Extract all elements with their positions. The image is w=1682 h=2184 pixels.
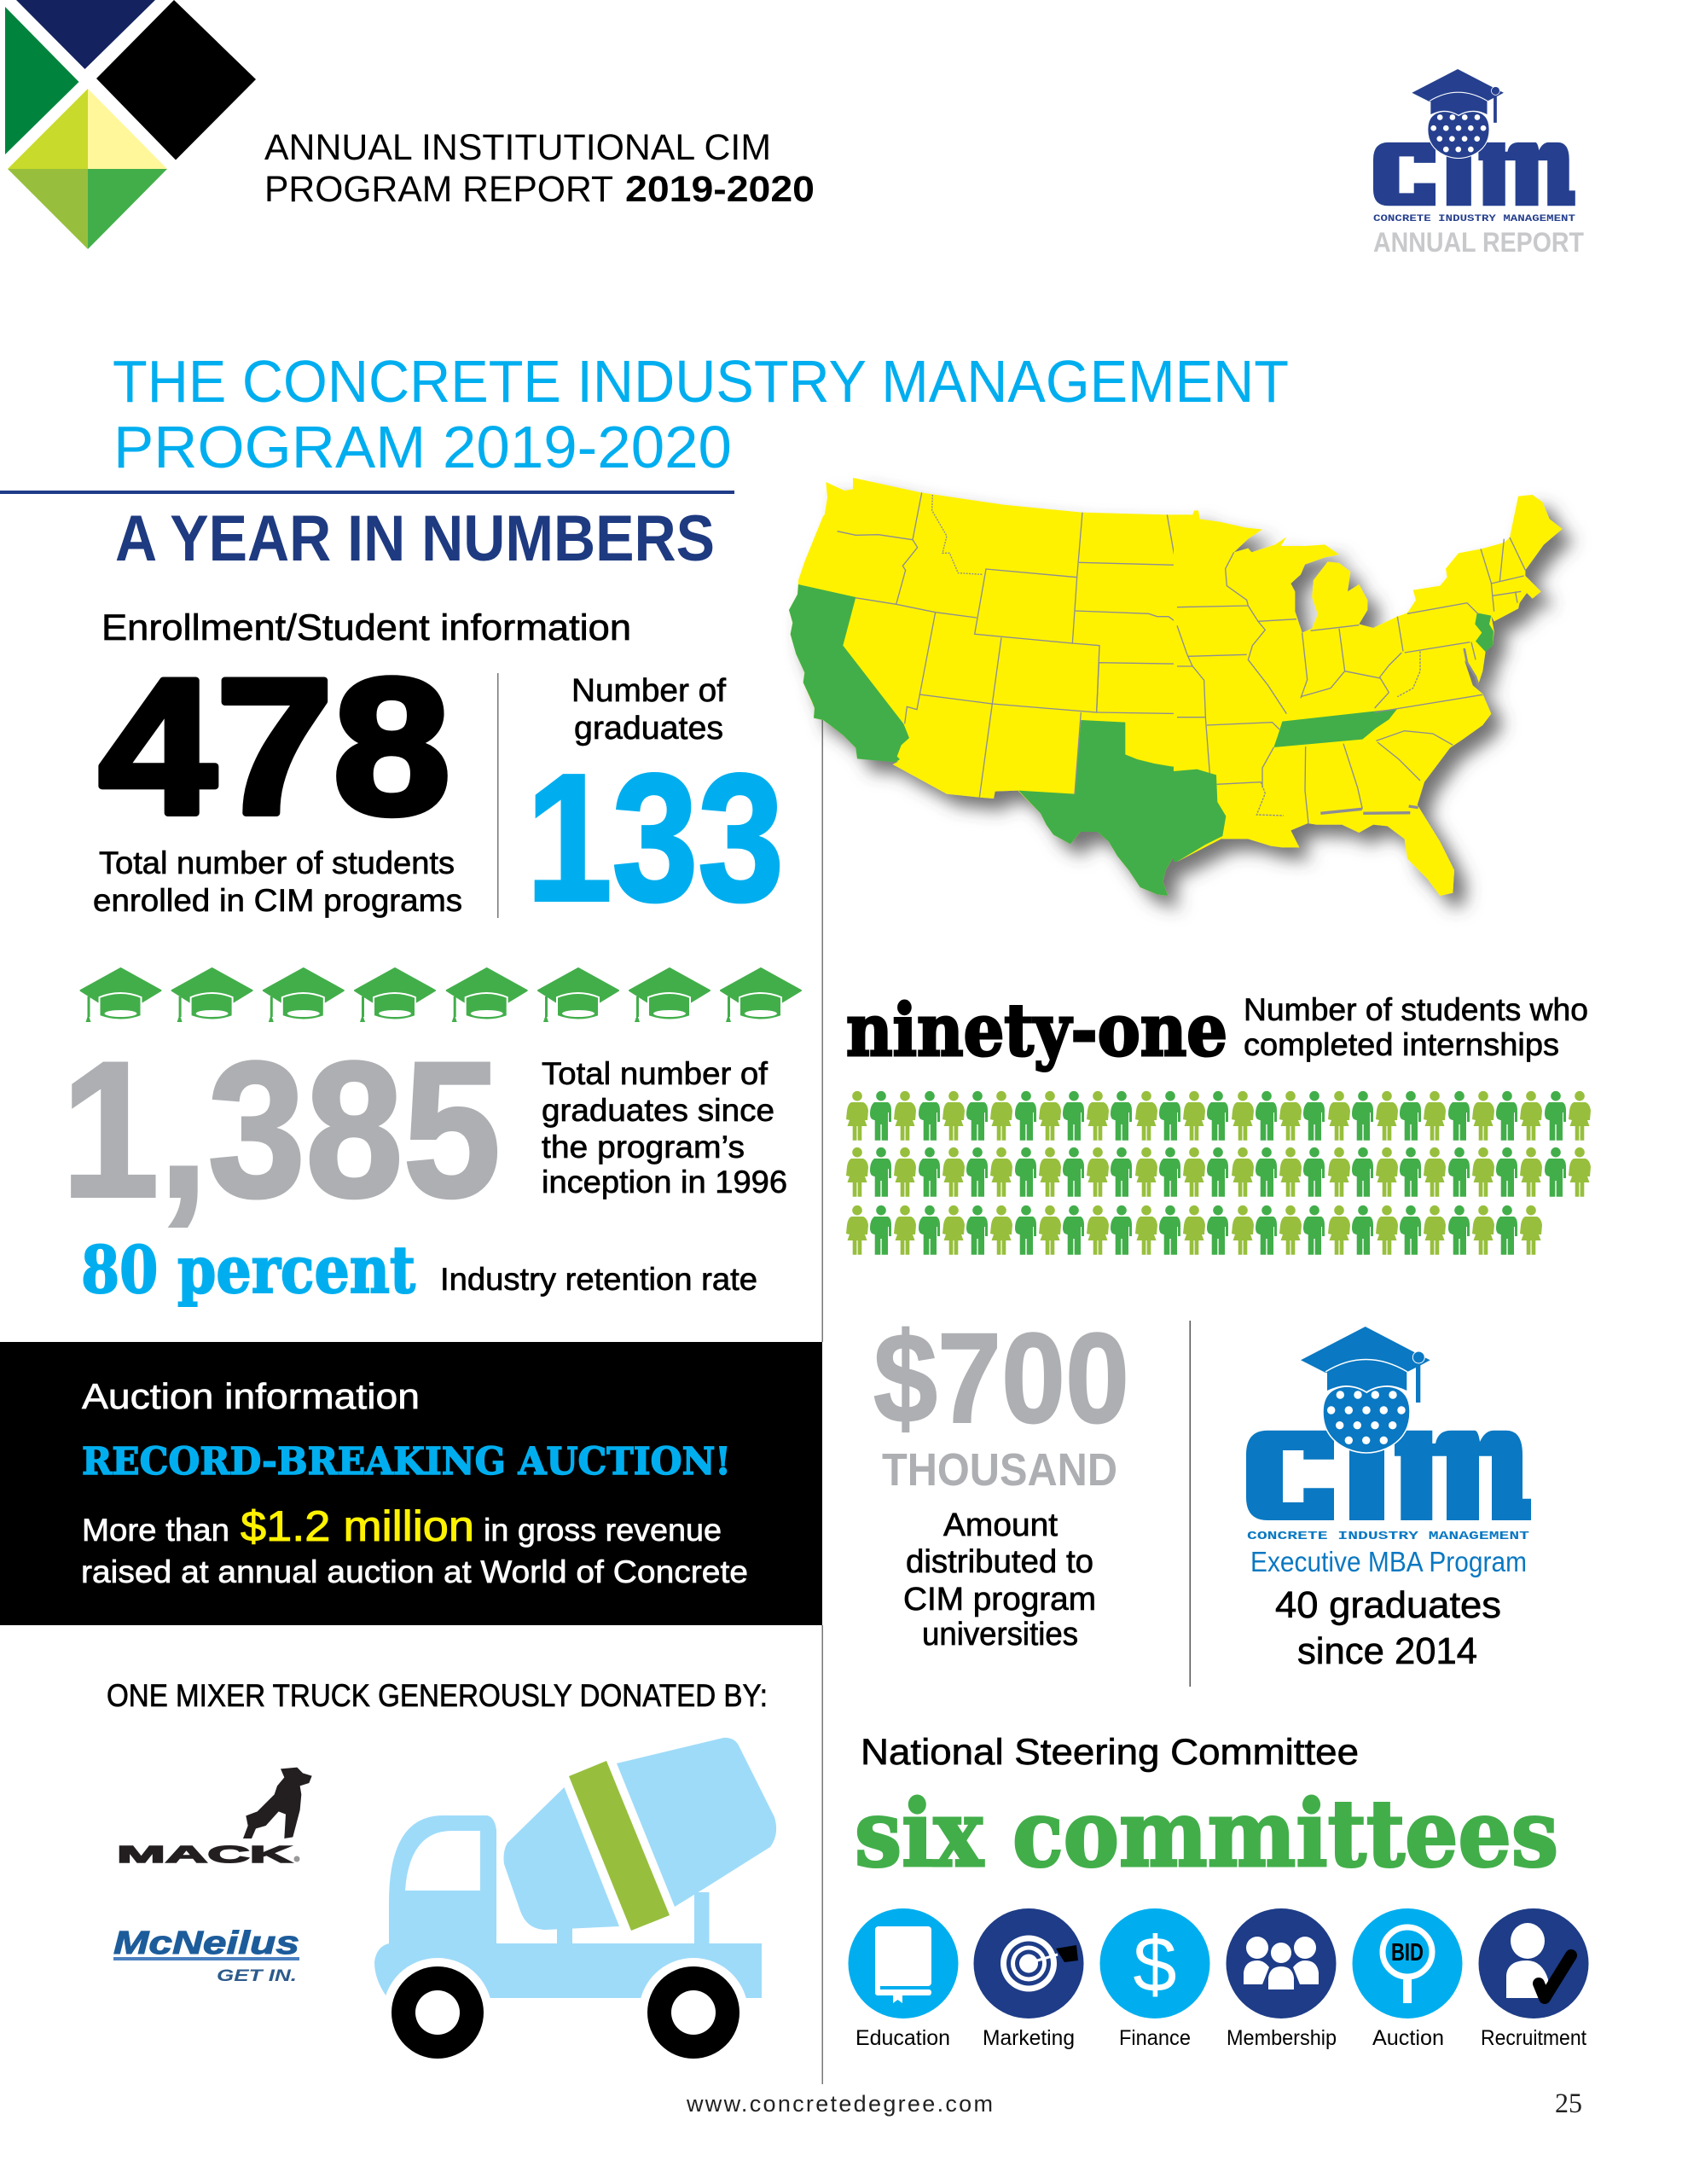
committee labels (856, 2026, 1586, 2050)
stat: $700 thousand: CIM program (903, 1582, 1096, 1618)
logo: CIM annual report: CONCRETE INDUSTRY MANAGEMENT (1373, 214, 1575, 224)
main title (113, 348, 1289, 480)
committee labels: Education (856, 2026, 950, 2050)
panel: auction information: $1.2 million (241, 1502, 474, 1550)
logo: CIM annual report: ANNUAL REPORT (1373, 227, 1584, 258)
stat: 133 graduates (526, 673, 784, 938)
stat: 133 graduates: Number of (571, 673, 726, 709)
heading: mixer truck donors: ONE MIXER TRUCK GENEROUSLY DONATED BY: (107, 1678, 768, 1713)
icon: auction (1353, 1908, 1462, 2018)
map state: Texas east (1174, 770, 1226, 862)
logo: McNeilus (113, 1926, 299, 1985)
logo: CIM executive MBA: 40 graduates (1275, 1584, 1501, 1626)
icon: recruitment (1479, 1908, 1588, 2018)
footer: website: www.concretedegree.com (686, 2091, 993, 2117)
committee labels: Recruitment (1481, 2026, 1586, 2050)
icon: auction: BID (1391, 1939, 1424, 1966)
subheading: enrollment: Enrollment/Student information (102, 607, 631, 648)
committee labels: Auction (1372, 2026, 1444, 2050)
logo: Mack (117, 1768, 312, 1867)
stat: $700 thousand: universities (922, 1617, 1078, 1653)
stat: 478 students: 478 (99, 638, 450, 854)
icon: membership (1227, 1908, 1336, 2018)
icon: education (848, 1908, 959, 2018)
logo: CIM annual report (1373, 69, 1584, 258)
committee labels: Membership (1227, 2026, 1337, 2050)
icons: 91 student figures (846, 1091, 1591, 1255)
panel: auction information: Auction information (82, 1376, 420, 1416)
heading: national steering committee: National Steering Committee (861, 1732, 1359, 1773)
map state: New Jersey (1475, 613, 1494, 652)
stat: 1,385 graduates: 1,385 (61, 1021, 501, 1237)
panel: auction information: in gross revenue (484, 1513, 722, 1548)
icon: finance: $ (1133, 1921, 1177, 2008)
committee labels: Finance (1119, 2026, 1191, 2050)
icon: finance (1100, 1908, 1209, 2018)
stat: ninety-one internships: completed internships (1244, 1027, 1559, 1062)
stat: 478 students: enrolled in CIM programs (93, 883, 462, 918)
stat: $700 thousand (873, 1306, 1129, 1653)
logo: CIM executive MBA (1246, 1327, 1531, 1672)
panel: auction information: raised at annual auction at World of Concrete (81, 1554, 748, 1589)
stat: six committees: six committees (855, 1780, 1558, 1888)
committee labels: Marketing (983, 2026, 1075, 2050)
logo: McNeilus: McNeilus (113, 1926, 299, 1961)
logo: CIM executive MBA: since 2014 (1297, 1630, 1477, 1672)
stat: $700 thousand: $700 (873, 1306, 1129, 1449)
panel: auction information: More than (82, 1513, 229, 1548)
stat: 80 percent retention: 80 percent (81, 1232, 415, 1308)
map state: California (789, 584, 909, 762)
icon: mixer truck (374, 1738, 776, 2067)
stat: $700 thousand: THOUSAND (882, 1444, 1117, 1496)
logo: geometric diamonds (5, 0, 256, 249)
stat: 80 percent retention (81, 1232, 757, 1308)
logo: Mack: MACK (117, 1841, 292, 1867)
stat: $700 thousand: distributed to (906, 1544, 1093, 1580)
stat: 1,385 graduates: Total number of (542, 1056, 768, 1091)
map state: Texas west (1018, 720, 1188, 896)
stat: 1,385 graduates: graduates since (542, 1093, 774, 1128)
main title: THE CONCRETE INDUSTRY MANAGEMENT (113, 348, 1289, 415)
header: report title: 2019-2020 (625, 169, 815, 210)
stat: 80 percent retention: Industry retention rate (440, 1262, 757, 1297)
panel: auction information: RECORD-BREAKING AUCTION! (82, 1440, 731, 1484)
stat: 478 students: Total number of students (99, 845, 455, 880)
stat: $700 thousand: Amount (943, 1507, 1058, 1543)
stat: 1,385 graduates: the program’s (542, 1130, 745, 1165)
logo: McNeilus: GET IN. (217, 1967, 297, 1985)
stat: ninety-one internships: ninety-one (846, 988, 1227, 1072)
icon: marketing (974, 1908, 1083, 2018)
main title: PROGRAM 2019-2020 (113, 414, 732, 480)
stat: 1,385 graduates: inception in 1996 (542, 1165, 787, 1199)
stat: ninety-one internships: Number of students who (1244, 992, 1588, 1027)
stat: 1,385 graduates (61, 1021, 787, 1237)
stat: 478 students (93, 638, 462, 918)
icons: graduation caps row (80, 968, 801, 1022)
header: report title: ANNUAL INSTITUTIONAL CIM (264, 127, 771, 168)
heading: a year in numbers: A YEAR IN NUMBERS (115, 502, 715, 575)
header: report title (264, 127, 815, 210)
stat: 133 graduates: 133 (526, 736, 784, 938)
map state: Tennessee (1273, 709, 1397, 747)
stat: 133 graduates: graduates (574, 711, 723, 746)
stat: ninety-one internships (846, 988, 1588, 1072)
logo: CIM executive MBA: Executive MBA Program (1250, 1546, 1527, 1577)
map: United States (789, 478, 1563, 896)
header: report title: PROGRAM REPORT (264, 169, 613, 210)
footer: page number: 25 (1555, 2088, 1582, 2119)
panel: auction information (0, 1342, 822, 1625)
logo: CIM executive MBA: CONCRETE INDUSTRY MANAGEMENT (1247, 1530, 1529, 1543)
